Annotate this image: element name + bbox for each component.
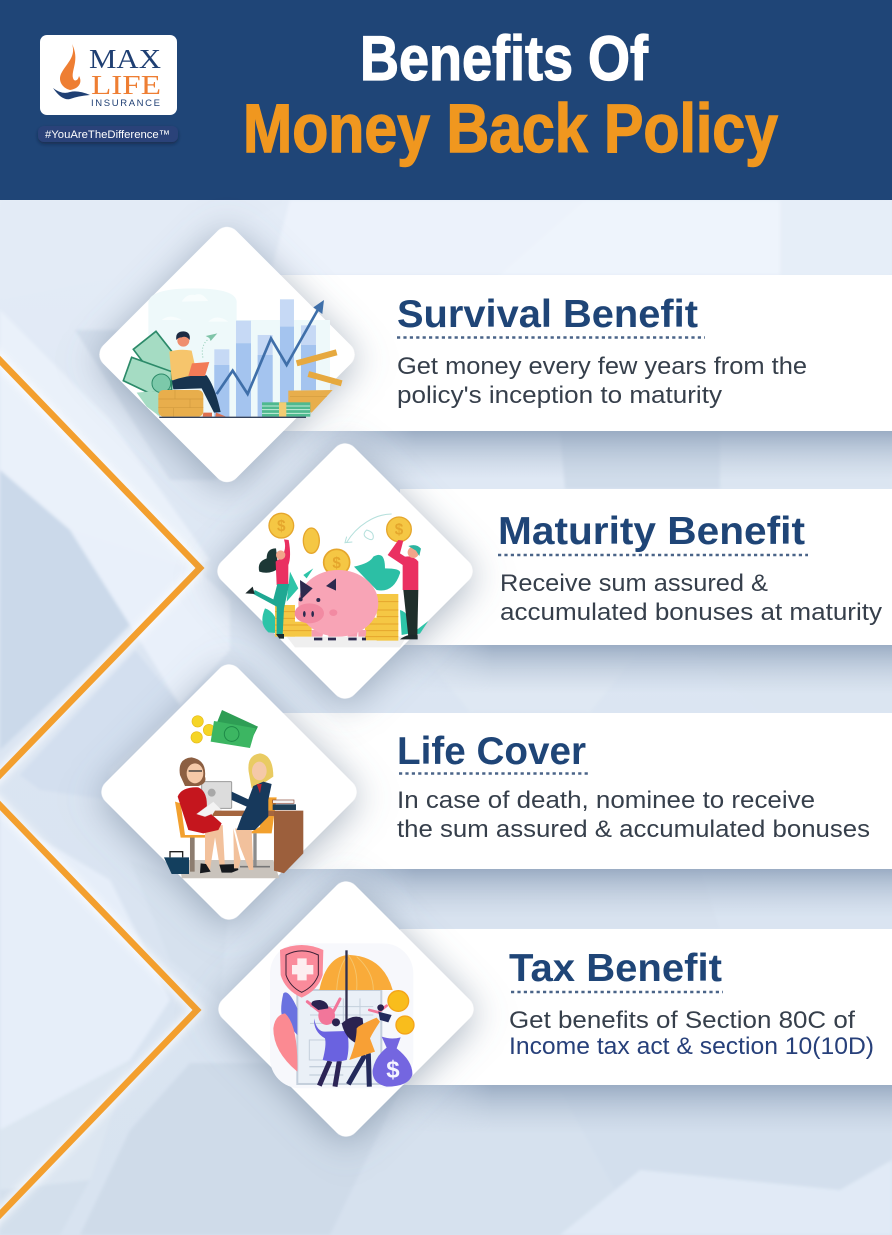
icon: piggy bank with people and coins: $ — [277, 518, 286, 535]
text: tax benefit: Tax Benefit — [509, 947, 722, 990]
logo: INSURANCE — [91, 98, 160, 109]
text: life cover: Life Cover — [397, 730, 586, 773]
logo: LIFE — [91, 70, 161, 100]
panel: life cover — [270, 713, 892, 917]
panel: survival benefit — [270, 275, 892, 479]
orange zig-zag line — [0, 350, 200, 1225]
diamond: survival — [94, 222, 360, 487]
text: survival benefit: policy's inception to maturity — [397, 382, 722, 409]
logo: MAX — [89, 44, 162, 74]
diamond: maturity — [212, 438, 478, 704]
diamond: life cover — [96, 659, 362, 925]
text: maturity benefit: Maturity Benefit — [498, 510, 805, 553]
text: tax benefit — [509, 947, 874, 1060]
text: survival benefit — [397, 293, 807, 409]
icon: investor on coins with growth chart — [123, 288, 342, 417]
title — [243, 24, 778, 167]
panel: maturity benefit — [380, 489, 892, 693]
icon: family under umbrella with tax form: $ — [386, 1056, 400, 1083]
text: tax benefit: Income tax act & section 10(10D) — [509, 1033, 874, 1060]
text: survival benefit: Survival Benefit — [397, 293, 698, 336]
logo: flame and wave — [53, 44, 90, 99]
text: maturity benefit — [498, 510, 882, 626]
panel: tax benefit — [380, 929, 892, 1133]
icon: family under umbrella with tax form — [270, 943, 414, 1088]
text: life cover: the sum assured & accumulated bonuses — [397, 816, 870, 843]
text: life cover: In case of death, nominee to receive — [397, 787, 815, 814]
text: survival benefit: Get money every few years from the — [397, 353, 807, 380]
logo — [38, 35, 178, 142]
diamond: tax — [213, 876, 479, 1142]
text: maturity benefit: accumulated bonuses at maturity — [500, 599, 882, 626]
icon: piggy bank with people and coins: $ — [332, 555, 341, 572]
text: tax benefit: Get benefits of Section 80C of — [509, 1007, 855, 1034]
title: Money Back Policy — [243, 90, 778, 167]
title: Benefits Of — [360, 24, 649, 94]
header band — [0, 0, 892, 200]
icon: piggy bank with people and coins — [245, 513, 428, 647]
icon: piggy bank with people and coins: $ — [395, 522, 404, 539]
text: life cover — [397, 730, 870, 843]
logo: hashtag pill: #YouAreTheDifference™ — [45, 129, 170, 141]
icon: two women at a desk with money — [164, 710, 303, 878]
text: maturity benefit: Receive sum assured & — [500, 570, 768, 597]
